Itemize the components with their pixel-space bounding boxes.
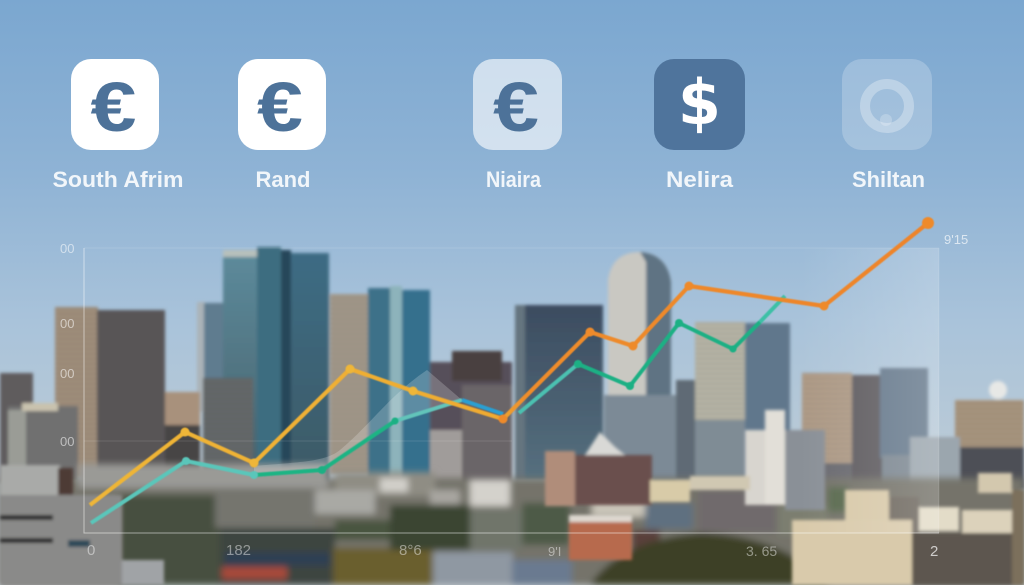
label: Rand: Rand <box>256 167 310 192</box>
icon: dollar on blue tile <box>654 59 745 150</box>
x-axis labels: 3. 65 <box>746 543 777 559</box>
y-axis labels <box>60 241 74 449</box>
line: teal-green series <box>91 296 785 523</box>
icon: euro on pale tile <box>473 59 562 150</box>
x-axis labels <box>87 542 938 560</box>
line: yellow to orange series <box>90 223 928 505</box>
line markers <box>180 217 934 479</box>
label: Nelira: Nelira <box>666 167 734 192</box>
x-axis labels: 9'I <box>548 544 561 559</box>
chart panel: translucent right section <box>800 248 939 533</box>
x-axis labels: 182 <box>226 542 251 559</box>
icon: euro on white tile <box>238 59 326 150</box>
currency card 1: € <box>91 69 136 147</box>
background: blurred city skyline <box>0 247 1024 500</box>
currency card 4 <box>654 59 745 192</box>
label: Shiltan: Shiltan <box>852 167 925 192</box>
currency card 5 <box>842 59 932 192</box>
background: front city blocks <box>0 410 1024 585</box>
y-axis labels: 00 <box>60 434 74 449</box>
label: Niaira: Niaira <box>486 167 542 192</box>
y-axis labels: 00 <box>60 316 74 331</box>
chart: axes, tick labels and lines <box>60 217 968 560</box>
currency card 3: € <box>493 69 539 147</box>
label: South Afrim: South Afrim <box>52 167 184 192</box>
x-axis labels: 2 <box>930 543 938 560</box>
currency card 2 <box>238 59 326 192</box>
y-axis labels: 00 <box>60 366 74 381</box>
background: blurred midground houses and trees <box>0 464 1024 585</box>
currency card 4: $ <box>678 66 721 139</box>
x-axis labels: 8°6 <box>399 542 422 559</box>
currency card 3 <box>473 59 562 192</box>
y-axis labels: 00 <box>60 241 74 256</box>
currency card 1 <box>52 59 184 192</box>
icon: faded ring on translucent tile <box>842 59 932 150</box>
chart axes <box>84 248 939 533</box>
top-right value label: 9'15 <box>944 232 968 247</box>
area under the lines <box>254 370 462 475</box>
x-axis labels: 0 <box>87 542 95 559</box>
chart gridlines <box>84 248 939 533</box>
icon: euro on white tile <box>71 59 159 150</box>
currency card 2: € <box>257 69 303 147</box>
